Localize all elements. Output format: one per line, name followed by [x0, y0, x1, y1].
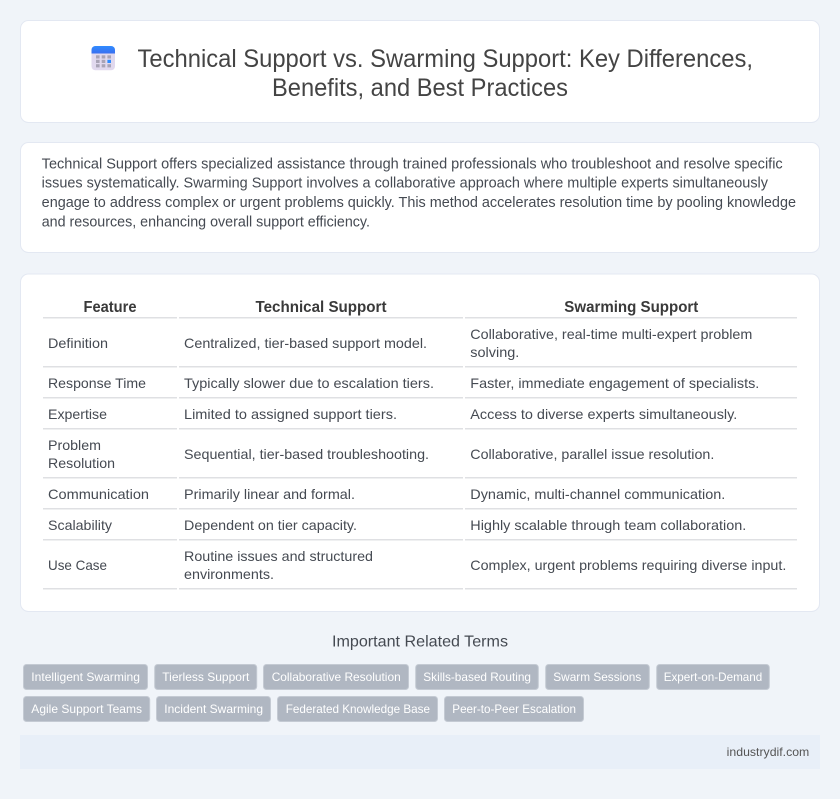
row: Communication: Primarily linear and formal.: [184, 486, 355, 502]
row: Expertise: Access to diverse experts simultaneously.: [470, 406, 737, 422]
heading: important related terms: Important Related Terms: [332, 634, 508, 651]
footer bar: [20, 735, 820, 769]
tag: Federated Knowledge Base: [278, 696, 438, 722]
row: Expertise: Expertise: [48, 406, 107, 422]
row: Expertise: Limited to assigned support tiers.: [184, 406, 397, 422]
table header row: Technical Support: [256, 299, 387, 316]
panel: intro text: [20, 142, 820, 252]
row: Use Case: Routine issues and structured: [184, 548, 373, 564]
row: Problem Resolution: Collaborative, parallel issue resolution.: [470, 446, 714, 462]
row: Problem Resolution: Resolution: [48, 455, 115, 471]
row: Communication: [43, 486, 797, 510]
table header row: [43, 299, 797, 318]
row: Problem Resolution: Problem: [48, 437, 101, 453]
tag: Collaborative Resolution: Collaborative Resolution: [272, 670, 401, 684]
tag: Agile Support Teams: Agile Support Teams: [31, 702, 142, 716]
tag: Federated Knowledge Base: Federated Knowledge Base: [286, 702, 430, 716]
row: Scalability: Dependent on tier capacity.: [184, 517, 357, 533]
table header row: Feature: [84, 299, 137, 316]
row: Definition: solving.: [470, 344, 519, 360]
tag: Incident Swarming: Incident Swarming: [164, 702, 263, 716]
row: Problem Resolution: Sequential, tier-based troubleshooting.: [184, 446, 429, 462]
icon: calendar: [92, 46, 115, 70]
row: Scalability: [43, 517, 797, 540]
footer site name: industrydif.com: [727, 745, 809, 759]
intro paragraph: engage to address complex or urgent problems quickly. This method accelerates resolution time by pooling knowledge: [42, 195, 796, 211]
row: Communication: Communication: [48, 486, 149, 502]
row: Scalability: Highly scalable through team collaboration.: [470, 517, 746, 533]
row: Response Time: [43, 375, 797, 398]
row: Use Case: Complex, urgent problems requiring diverse input.: [470, 557, 786, 573]
tag: Collaborative Resolution: [264, 664, 408, 690]
panel: title header: [20, 20, 820, 122]
row: Response Time: Faster, immediate engagement of specialists.: [470, 375, 759, 391]
tag: Intelligent Swarming: Intelligent Swarming: [31, 670, 140, 684]
title: Benefits, and Best Practices: [272, 74, 568, 102]
tag: Peer-to-Peer Escalation: [444, 696, 584, 722]
row: Definition: Collaborative, real-time multi-expert problem: [470, 326, 752, 342]
tag: Swarm Sessions: Swarm Sessions: [553, 670, 641, 684]
tag: Expert-on-Demand: [657, 664, 769, 690]
row: Scalability: Scalability: [48, 517, 112, 533]
row: Use Case: [43, 548, 797, 590]
tag: Tierless Support: Tierless Support: [162, 670, 250, 684]
row: Definition: Definition: [48, 335, 108, 351]
row: Definition: [43, 326, 797, 368]
row: Use Case: Use Case: [48, 557, 107, 573]
tag: Agile Support Teams: [24, 696, 150, 722]
tag: Peer-to-Peer Escalation: Peer-to-Peer Escalation: [452, 702, 576, 716]
row: Expertise: [43, 406, 797, 430]
tag: Swarm Sessions: [546, 664, 649, 690]
title: [138, 45, 753, 102]
intro paragraph: Technical Support offers specialized assistance through trained professionals who troubleshoot and resolve specific: [42, 156, 783, 172]
tag: Tierless Support: [155, 664, 257, 690]
row: Use Case: environments.: [184, 566, 274, 582]
panel: comparison table: [20, 274, 820, 612]
tag: Intelligent Swarming: [24, 664, 148, 690]
intro paragraph: [42, 156, 796, 231]
tag: Skills-based Routing: [416, 664, 538, 690]
row: Response Time: Typically slower due to escalation tiers.: [184, 375, 434, 391]
intro paragraph: issues systematically. Swarming Support involves a collaborative approach where multiple experts simultaneously: [42, 176, 769, 192]
tag: Skills-based Routing: Skills-based Routing: [423, 670, 531, 684]
tag: Expert-on-Demand: Expert-on-Demand: [664, 670, 762, 684]
tag: Incident Swarming: [156, 696, 270, 722]
row: Response Time: Response Time: [48, 375, 146, 391]
related term tags: [24, 664, 769, 722]
row: Communication: Dynamic, multi-channel communication.: [470, 486, 725, 502]
table header row: Swarming Support: [564, 299, 699, 316]
row: Problem Resolution: [43, 437, 797, 478]
intro paragraph: and resources, enhancing overall support efficiency.: [42, 215, 370, 231]
title: Technical Support vs. Swarming Support: Key Differences,: [138, 45, 753, 73]
row: Definition: Centralized, tier-based support model.: [184, 335, 427, 351]
